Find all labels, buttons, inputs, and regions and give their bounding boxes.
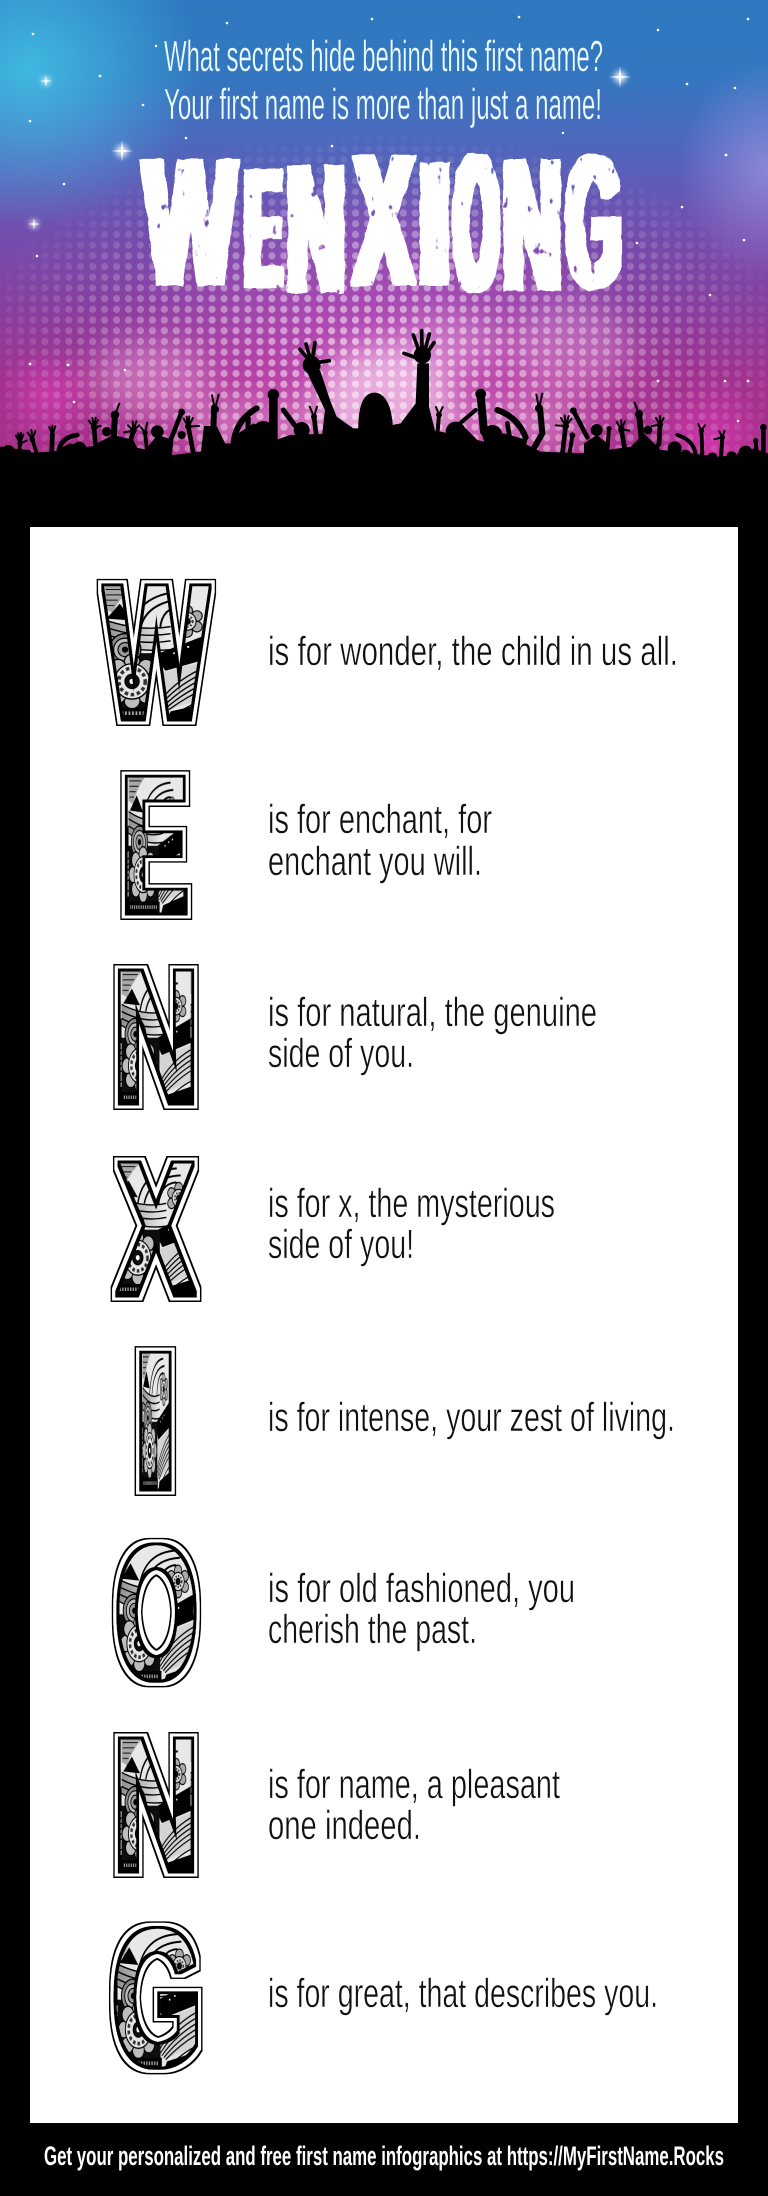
row N second bbox=[113, 1698, 560, 1911]
letter N second: N bbox=[113, 1698, 199, 1911]
letter O: O bbox=[115, 1505, 198, 1719]
row G bbox=[112, 1890, 658, 2108]
row I bbox=[130, 1312, 675, 1531]
text N second: is for name, a pleasant bbox=[268, 1761, 560, 1807]
crowd: right half bbox=[384, 331, 768, 480]
dot light grid bbox=[0, 146, 766, 456]
text X bbox=[268, 1180, 555, 1267]
text N bbox=[268, 989, 597, 1076]
text N: is for natural, the genuine bbox=[268, 989, 597, 1035]
name title: X bbox=[354, 117, 413, 324]
text E: is for enchant, for bbox=[268, 796, 492, 842]
row E bbox=[121, 737, 492, 955]
row N bbox=[113, 930, 597, 1143]
text E bbox=[268, 796, 492, 884]
text X: side of you! bbox=[268, 1221, 414, 1267]
name title: N bbox=[287, 128, 345, 330]
center figure hair bbox=[358, 393, 393, 433]
intro text bbox=[164, 32, 603, 129]
name title: E bbox=[245, 136, 282, 322]
text O: is for old fashioned, you bbox=[268, 1565, 575, 1611]
letter E: E bbox=[121, 737, 189, 955]
row O bbox=[115, 1505, 575, 1719]
letter N: N bbox=[113, 930, 199, 1143]
text O bbox=[268, 1565, 575, 1652]
name title: N bbox=[503, 121, 561, 329]
white panel bbox=[30, 527, 738, 2123]
name title bbox=[144, 116, 621, 330]
crowd: left half bbox=[0, 343, 393, 480]
letter W: W bbox=[104, 546, 209, 760]
text N: side of you. bbox=[268, 1030, 414, 1076]
name title: W bbox=[144, 123, 236, 322]
row W bbox=[104, 546, 678, 760]
sparkle stars bbox=[28, 16, 749, 422]
letter G: G bbox=[112, 1890, 202, 2108]
crowd silhouette bbox=[0, 331, 768, 527]
letter I: I bbox=[130, 1312, 181, 1531]
name title: O bbox=[455, 116, 498, 329]
text O: cherish the past. bbox=[268, 1606, 477, 1652]
row X bbox=[117, 1123, 555, 1335]
stage smoke glow bbox=[90, 305, 630, 465]
name title: G bbox=[566, 118, 621, 326]
name title: I bbox=[416, 128, 453, 322]
text N second: one indeed. bbox=[268, 1802, 421, 1848]
text E: enchant you will. bbox=[268, 838, 482, 884]
hero background bbox=[0, 0, 768, 527]
letter X: X bbox=[117, 1123, 195, 1335]
text X: is for x, the mysterious bbox=[268, 1180, 555, 1226]
text N second bbox=[268, 1761, 560, 1848]
